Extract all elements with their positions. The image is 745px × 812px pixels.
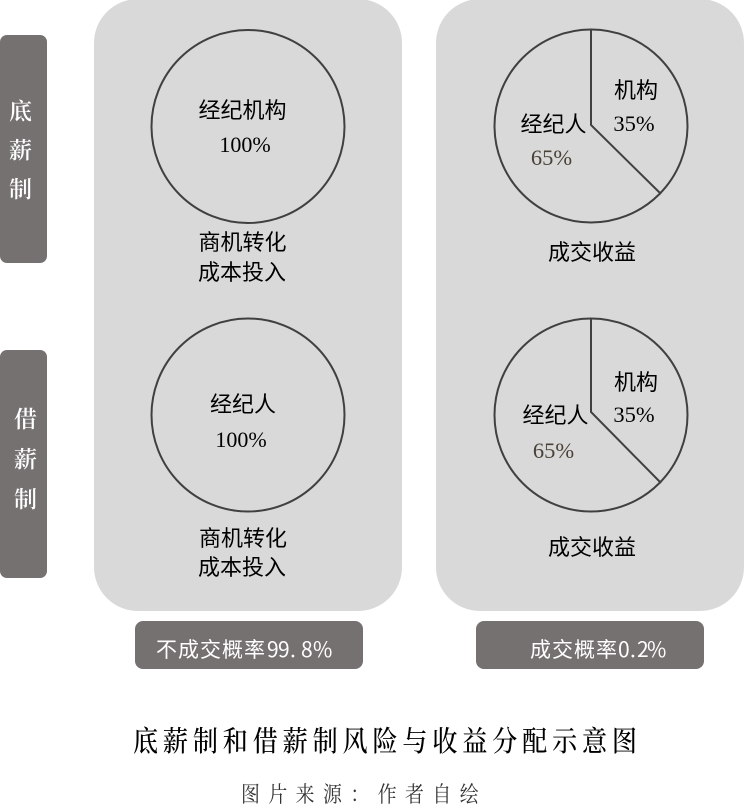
label: failure probability (135, 621, 363, 669)
panel: left cost column (94, 0, 402, 611)
text: top right caption: 成交收益 (548, 235, 636, 267)
chart: top right pie: 35% (613, 111, 655, 136)
chart: bottom right pie: 经纪人 (522, 398, 589, 430)
chart: bottom right pie: 机构 (614, 365, 658, 397)
source note: 图片来源：作者自绘 (241, 776, 487, 808)
chart: brokerage 100 percent circle: 100% (219, 132, 271, 157)
text: bottom left caption: 成本投入 (198, 550, 286, 582)
label: base salary system: 底 (9, 93, 32, 126)
chart: bottom right pie: 35% (613, 402, 655, 427)
label: loan salary system (0, 350, 47, 578)
text: bottom right caption: 成交收益 (548, 530, 636, 562)
chart: top right pie: 经纪人 (520, 107, 587, 139)
chart: agent 100 percent circle: 100% (215, 427, 267, 452)
text: top left caption (198, 225, 287, 287)
chart: agent 100 percent circle: 经纪人 (210, 387, 276, 419)
label: base salary system: 制 (9, 171, 32, 204)
label: failure probability: 不成交概率99.8% (156, 634, 332, 664)
label: loan salary system: 薪 (14, 441, 37, 474)
chart: top right pie (494, 29, 688, 222)
chart: top right pie: 65% (531, 145, 572, 170)
text: top left caption: 成本投入 (198, 255, 286, 287)
chart: brokerage 100 percent circle (152, 30, 344, 223)
label: base salary system (0, 35, 47, 263)
label: loan salary system: 借 (14, 401, 37, 434)
chart: brokerage 100 percent circle: 经纪机构 (198, 93, 287, 125)
label: base salary system: 薪 (9, 132, 32, 165)
title: 底薪制和借薪制风险与收益分配示意图 (133, 718, 642, 759)
chart: bottom right pie (494, 318, 688, 512)
label: success probability: 成交概率0.2% (530, 634, 666, 664)
panel: right revenue column (436, 0, 744, 611)
label: loan salary system: 制 (14, 481, 37, 514)
label: success probability (476, 621, 704, 669)
text: bottom left caption (198, 521, 287, 582)
text: bottom left caption: 商机转化 (199, 521, 287, 553)
chart: bottom right pie: 65% (533, 438, 574, 463)
text: top left caption: 商机转化 (198, 225, 287, 257)
chart: agent 100 percent circle (152, 318, 344, 512)
chart: top right pie: 机构 (614, 73, 658, 105)
